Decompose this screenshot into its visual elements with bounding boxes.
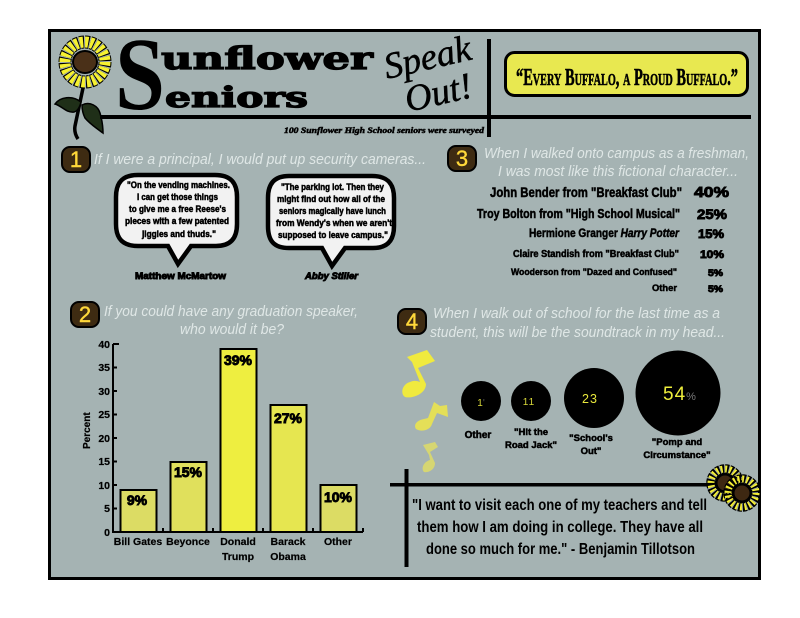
bubble: Pomp and Circumstance 54: "Pomp and — [652, 437, 702, 448]
bar: Other 10%: 10% — [324, 489, 353, 505]
bar: Barack Obama 27%: 27% — [274, 410, 303, 426]
y axis labels: 5 — [104, 503, 110, 515]
motto banner — [506, 52, 748, 96]
bar: Donald Trump 39% — [220, 349, 256, 532]
speech bubble: Matthew: I can get those things — [137, 192, 218, 202]
badge 3: 3 — [456, 146, 468, 171]
ranked list: Claire Standish from "Breakfast Club" — [513, 249, 679, 260]
name: Matthew: Matthew McMartow — [135, 271, 227, 282]
bar: Donald Trump 39%: 39% — [224, 352, 253, 368]
bar chart — [82, 339, 363, 563]
speech bubble: Matthew: "On the vending machines. — [127, 180, 230, 190]
x axis labels: Donald — [220, 536, 256, 548]
y axis labels: 35 — [98, 362, 110, 374]
title: eniors — [165, 81, 308, 114]
x axis labels — [114, 536, 352, 563]
y axis and ticks — [113, 344, 363, 532]
y axis labels: 20 — [98, 433, 110, 445]
bubble: Hit the Road Jack 11 — [505, 381, 557, 451]
ranked list: John Bender from "Breakfast Club" — [490, 184, 682, 200]
bubble: Other 11: 1' — [477, 398, 485, 409]
speech bubble: Abby: supposed to leave campus." — [278, 230, 388, 240]
icon: small sunflower front — [728, 479, 756, 507]
bar: Other 10% — [320, 485, 356, 532]
quote text — [412, 497, 707, 558]
heading: Speak Out: Out! — [401, 66, 476, 121]
badge 1: 1 — [70, 147, 82, 172]
x axis labels: Beyonce — [166, 536, 210, 548]
question 4 text: When I walk out of school for the last time as a — [433, 306, 720, 322]
bubble: Other 11 — [461, 381, 501, 441]
badge 2 — [71, 302, 99, 327]
bubble: Hit the Road Jack 11: Road Jack" — [505, 440, 557, 451]
speech bubble: Abby: seniors magically have lunch — [279, 206, 386, 216]
y axis labels: 30 — [98, 386, 110, 398]
bubble: School's Out 23: Out" — [581, 446, 601, 457]
ranked list: 25% — [697, 207, 727, 222]
bar: Bill Gates 9% — [120, 490, 156, 532]
name: Abby: Abby Stiller — [304, 271, 359, 282]
icon: large sunflower — [55, 42, 105, 139]
speech bubble: Matthew: pieces with a few patented — [125, 216, 229, 226]
badge 1 — [62, 147, 90, 172]
speech bubble: Abby: might find out how all of the — [277, 194, 385, 204]
bubble: School's Out 23 — [564, 368, 624, 457]
speech bubble: Matthew — [116, 175, 237, 264]
panel: question 4 — [398, 306, 725, 472]
y axis labels: 40 — [98, 339, 110, 351]
bubble: Hit the Road Jack 11: "Hit the — [514, 427, 548, 438]
y axis labels: 15 — [98, 456, 110, 468]
survey note: 100 Sunflower High School seniors were surveyed — [284, 125, 485, 135]
x axis labels: Barack — [270, 536, 306, 548]
bubble: Pomp and Circumstance 54: Circumstance" — [643, 450, 711, 461]
question 1 text: If I were a principal, I would put up security cameras... — [94, 152, 426, 168]
bar: Barack Obama 27% — [270, 405, 306, 532]
quote rules — [390, 469, 725, 567]
heading: Speak Out: Speak — [380, 28, 476, 88]
ranked list: 40% — [694, 184, 729, 201]
panel: question 2 — [71, 302, 363, 563]
ranked list: 15% — [698, 227, 724, 241]
x axis labels: Trump — [222, 551, 254, 563]
speech bubble: Matthew: to give me a free Reese's — [129, 204, 226, 214]
bubble: School's Out 23: "School's — [569, 433, 613, 444]
title: unflower — [161, 41, 374, 77]
y axis labels: 10 — [98, 480, 110, 492]
question 3 text — [484, 146, 749, 180]
question 4 text: student, this will be the soundtrack in my head... — [430, 325, 725, 341]
badge 3 — [448, 146, 476, 171]
y axis title: Percent — [82, 412, 93, 449]
question 2 text: If you could have any graduation speaker, — [104, 304, 358, 320]
bubble: Other 11: Other — [465, 430, 491, 441]
question 4 text — [430, 306, 725, 341]
y axis labels: 0 — [104, 527, 110, 539]
icon: small sunflower back — [711, 469, 739, 497]
badge 4: 4 — [406, 309, 418, 334]
title — [115, 17, 374, 132]
speech bubble: Abby: from Wendy's when we aren't — [276, 218, 392, 228]
speech bubble: Abby: "The parking lot. Then they — [281, 182, 384, 192]
panel: question 3 — [448, 146, 749, 295]
badge 4 — [398, 309, 426, 334]
question 3 text: I was most like this fictional character... — [498, 164, 738, 180]
ranked list: Wooderson from "Dazed and Confused" — [511, 267, 677, 278]
panel: poster background — [50, 30, 760, 578]
ranked list: Hermione Granger Harry Potter — [529, 228, 679, 240]
question 2 text — [104, 304, 358, 338]
ranked list — [477, 184, 729, 295]
y axis labels: 25 — [98, 409, 110, 421]
x axis labels: Obama — [270, 551, 306, 563]
ranked list: Troy Bolton from "High School Musical" — [477, 206, 680, 221]
bubble: Pomp and Circumstance 54 — [636, 350, 720, 461]
x axis labels: Other — [324, 536, 352, 548]
badge 2: 2 — [79, 302, 91, 327]
quote text: done so much for me." - Benjamin Tillotson — [426, 541, 695, 558]
question 3 text: When I walked onto campus as a freshman, — [484, 146, 749, 162]
speech bubble: Matthew: jiggles and thuds." — [141, 229, 216, 239]
bar: Beyonce 15%: 15% — [174, 464, 203, 480]
question 2 text: who would it be? — [180, 322, 285, 338]
ranked list: 10% — [700, 249, 724, 261]
icon: medium music note — [415, 402, 448, 431]
ranked list: Other — [652, 283, 677, 294]
x axis labels: Bill Gates — [114, 536, 162, 548]
y axis labels — [98, 339, 110, 539]
speech bubble: Abby — [268, 176, 394, 266]
bar: Beyonce 15% — [170, 462, 206, 532]
quote text: them how I am doing in college. They have all — [417, 519, 703, 536]
header rules — [100, 39, 751, 137]
bubble: Hit the Road Jack 11: 11 — [523, 397, 535, 408]
heading: Speak Out — [380, 28, 476, 121]
bar: Bill Gates 9%: 9% — [127, 492, 148, 508]
panel: question 1 — [62, 147, 426, 282]
bubble: School's Out 23: 23 — [582, 392, 598, 406]
icon: small music note — [423, 442, 438, 472]
bubble: Pomp and Circumstance 54: 54% — [663, 384, 697, 405]
quote text: "I want to visit each one of my teachers and tell — [412, 497, 707, 514]
title: S — [115, 17, 165, 132]
icon: large music note — [402, 350, 435, 397]
ranked list: 5% — [708, 284, 724, 295]
ranked list: 5% — [708, 268, 724, 279]
